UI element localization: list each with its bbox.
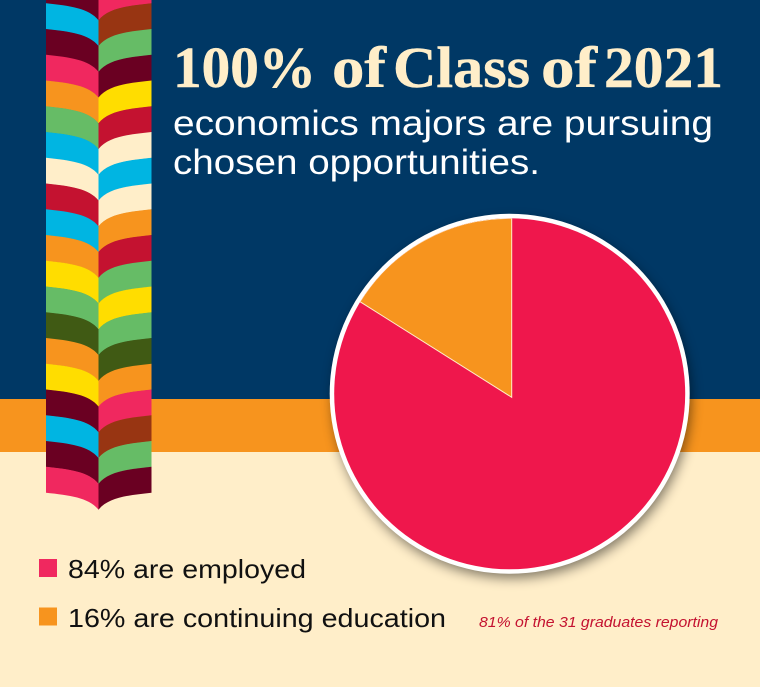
subtitle: economics majors are pursuing [173, 104, 713, 143]
subtitle: chosen opportunities. [173, 143, 540, 182]
slice: 16% continuing education [360, 218, 512, 397]
legend label: employed: 84% are employed [68, 554, 306, 584]
pie chart [330, 214, 691, 578]
legend label: continuing education: 16% are continuing education [68, 603, 446, 633]
slice: 84% employed [334, 218, 685, 569]
title: of [541, 35, 598, 100]
title: Class [393, 35, 530, 100]
title: of [332, 35, 387, 100]
decorative ribbon [46, 0, 152, 510]
legend swatch: continuing education [39, 608, 57, 626]
title: 100% [173, 35, 316, 100]
title: 2021 [604, 35, 723, 100]
legend swatch: employed [39, 559, 57, 577]
background: orange stripe [0, 399, 760, 452]
title [173, 35, 723, 100]
footnote: 81% of the 31 graduates reporting [479, 614, 719, 631]
background: cream band [0, 452, 760, 687]
background: navy band [0, 0, 760, 399]
legend [39, 554, 446, 633]
subtitle [173, 104, 713, 182]
